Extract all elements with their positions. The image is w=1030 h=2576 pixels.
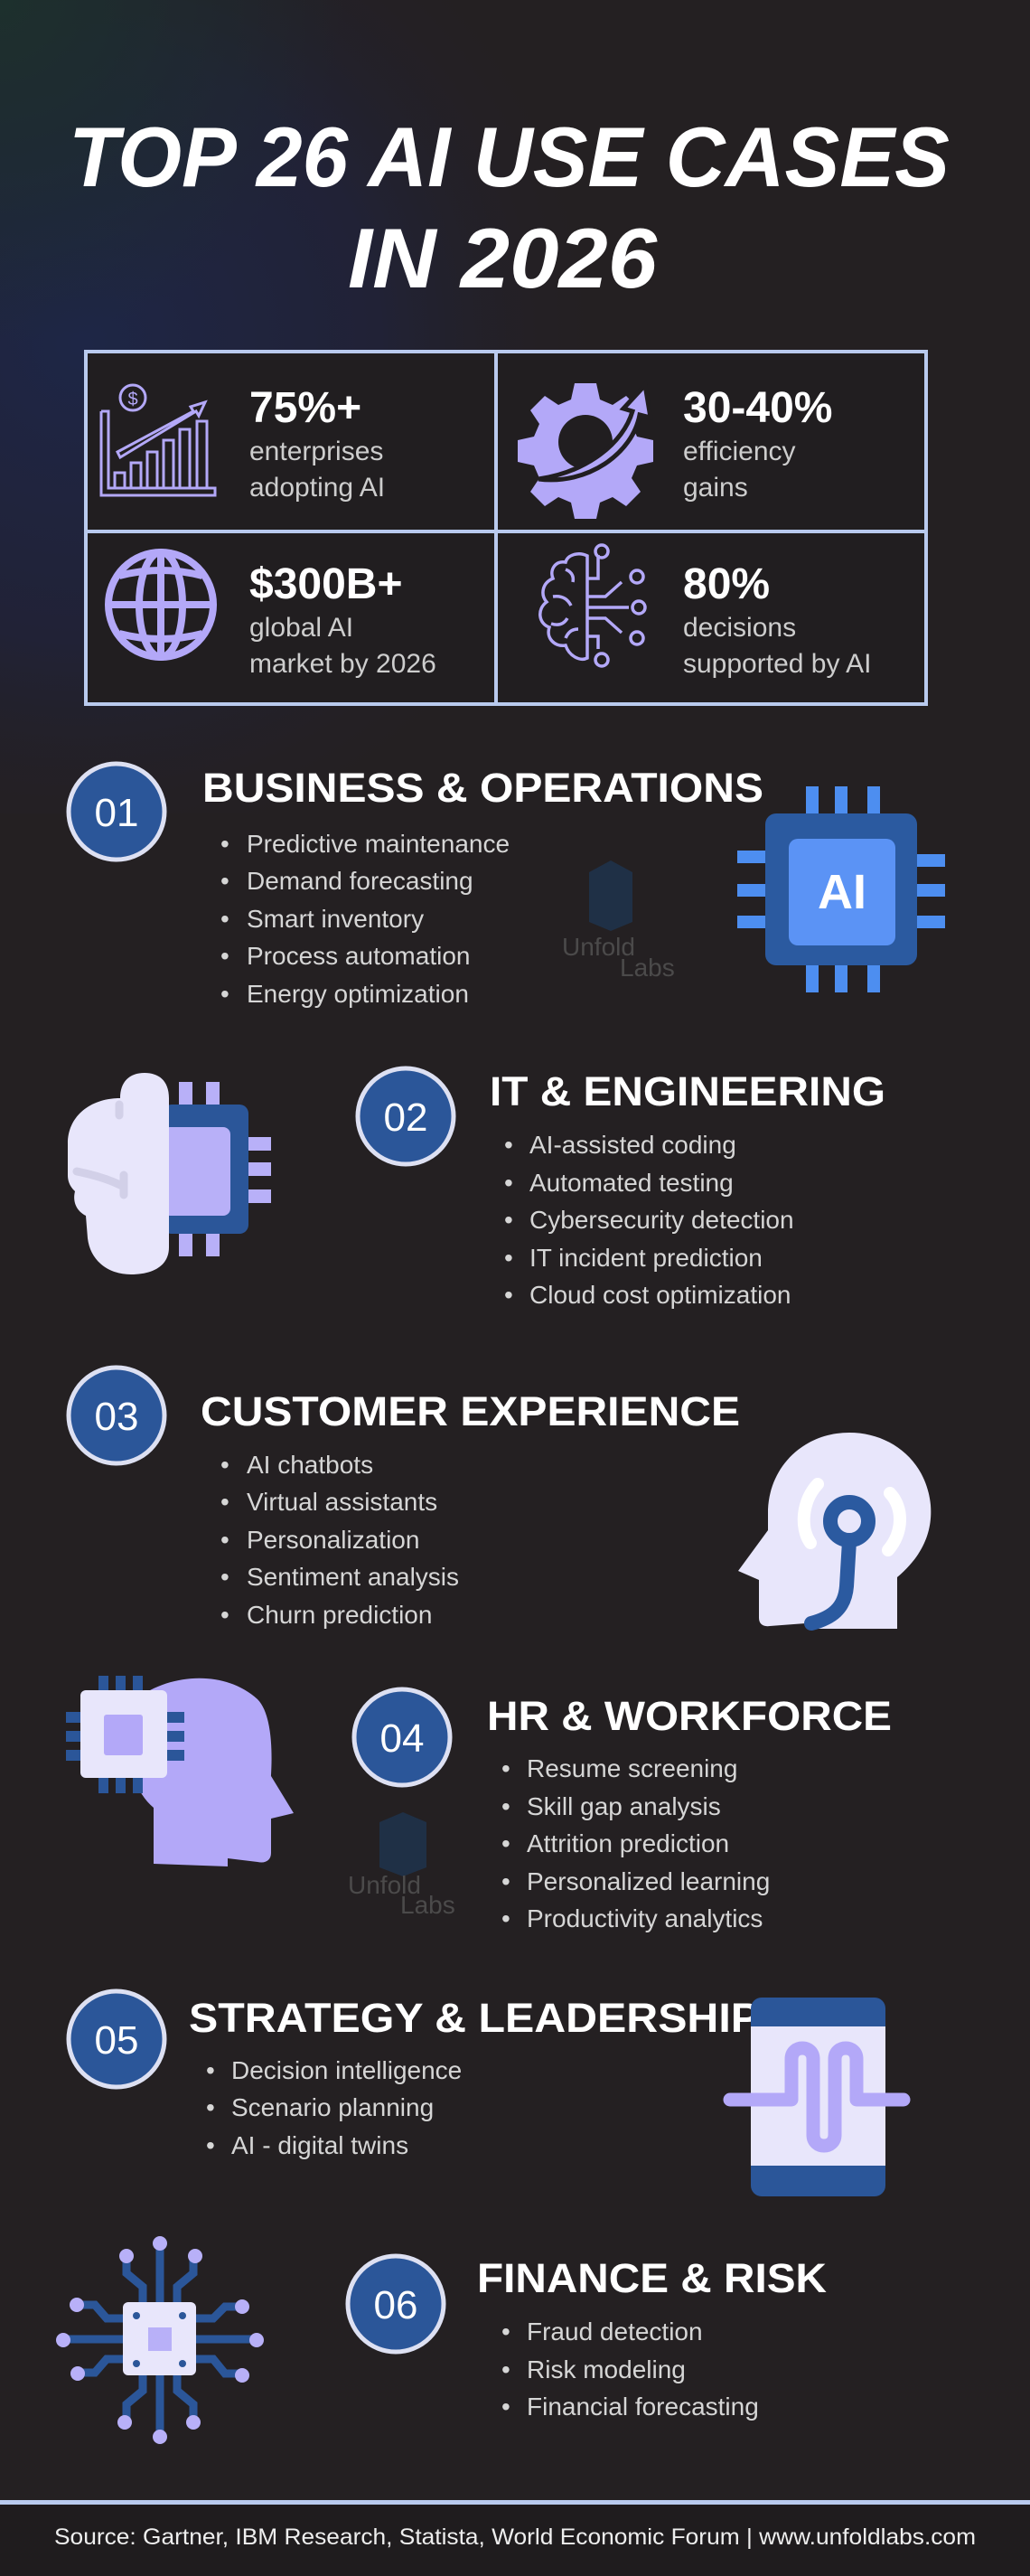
- bullet list 01: •: [220, 867, 229, 895]
- number badge 01: [69, 764, 164, 860]
- watermark: Labs: [400, 1891, 455, 1919]
- icon: brain chip: [68, 1073, 271, 1274]
- section 01: business & operations: [69, 764, 763, 1008]
- stat: 300B: [249, 560, 436, 679]
- stat: 300B: $300B+: [249, 560, 402, 608]
- heading 06: FINANCE & RISK: [477, 2255, 828, 2301]
- bullet list 01: Smart inventory: [247, 905, 424, 933]
- icon: brain circuit: [540, 545, 645, 666]
- bullet list 03: •: [220, 1563, 229, 1591]
- bullet list 06: Fraud detection: [527, 2317, 703, 2346]
- watermark: [348, 1812, 455, 1919]
- bullet list 03: •: [220, 1488, 229, 1516]
- icon: growth chart: $: [127, 390, 138, 409]
- stat: 80%: [683, 560, 871, 679]
- bullet list 03: •: [220, 1526, 229, 1554]
- stat: 80%: decisions: [683, 613, 796, 643]
- bullet list 01: Process automation: [247, 942, 470, 970]
- number badge 04: 04: [380, 1716, 424, 1761]
- bullet list 02: Cloud cost optimization: [529, 1281, 791, 1309]
- bullet list 02: •: [504, 1131, 513, 1159]
- stat: 30-40%: 30-40%: [683, 384, 832, 432]
- stat: 75%: 75%+: [249, 384, 361, 432]
- section 04: HR & workforce: [354, 1689, 892, 1932]
- bullet list 06: [501, 2317, 759, 2421]
- bullet list 03: Churn prediction: [247, 1601, 432, 1629]
- title: IN 2026: [348, 211, 658, 306]
- bullet list 01: Demand forecasting: [247, 867, 473, 895]
- heading 01: BUSINESS & OPERATIONS: [202, 765, 763, 811]
- bullet list 03: AI chatbots: [247, 1451, 373, 1479]
- footer: Source: Gartner, IBM Research, Statista, World Economic Forum | www.unfoldlabs.com: [54, 2524, 976, 2550]
- icon: growth chart: [101, 385, 215, 495]
- number badge 05: [69, 1991, 164, 2087]
- stat: 30-40%: efficiency: [683, 437, 796, 466]
- bullet list 06: •: [501, 2393, 510, 2421]
- bullet list 01: [220, 830, 510, 1008]
- icon: head with headset: [738, 1433, 931, 1629]
- bullet list 01: Energy optimization: [247, 980, 469, 1008]
- bullet list 04: Skill gap analysis: [527, 1792, 721, 1820]
- bullet list 05: •: [206, 2131, 215, 2159]
- watermark: [562, 860, 675, 982]
- bullet list 06: Financial forecasting: [527, 2393, 759, 2421]
- bullet list 04: •: [501, 1754, 510, 1782]
- icon: head with chip: [66, 1676, 294, 1866]
- bullet list 05: •: [206, 2056, 215, 2084]
- bullet list 04: Personalized learning: [527, 1867, 770, 1895]
- bullet list 06: •: [501, 2317, 510, 2346]
- number badge 02: 02: [384, 1095, 427, 1140]
- icon: circuit chip: [56, 2236, 264, 2444]
- section 05: strategy & leadership: [69, 1991, 760, 2159]
- title: TOP 26 AI USE CASES: [69, 109, 950, 204]
- stat: 75%: enterprises: [249, 437, 383, 466]
- section 06: finance & risk: [348, 2255, 828, 2421]
- bullet list 05: AI - digital twins: [231, 2131, 408, 2159]
- icon: phone with wave: [730, 1998, 904, 2196]
- stats panel: [86, 352, 926, 704]
- bullet list 03: •: [220, 1451, 229, 1479]
- bullet list 03: Sentiment analysis: [247, 1563, 459, 1591]
- watermark: Unfold: [562, 933, 635, 961]
- bullet list 03: Personalization: [247, 1526, 419, 1554]
- bullet list 06: Risk modeling: [527, 2355, 686, 2383]
- heading 05: STRATEGY & LEADERSHIP: [189, 1995, 760, 2041]
- bullet list 02: Automated testing: [529, 1169, 734, 1197]
- bullet list 02: [504, 1131, 794, 1309]
- number badge 06: 06: [374, 2283, 417, 2327]
- bullet list 03: Virtual assistants: [247, 1488, 437, 1516]
- number badge 01: 01: [95, 791, 138, 835]
- bullet list 03: •: [220, 1601, 229, 1629]
- heading 04: HR & WORKFORCE: [487, 1693, 892, 1739]
- bullet list 01: •: [220, 980, 229, 1008]
- bullet list 02: •: [504, 1244, 513, 1272]
- bullet list 05: Scenario planning: [231, 2093, 434, 2121]
- bullet list 02: IT incident prediction: [529, 1244, 763, 1272]
- title: [69, 109, 950, 306]
- bullet list 02: •: [504, 1169, 513, 1197]
- section 03: customer experience: [69, 1368, 740, 1629]
- stat: 300B: market by 2026: [249, 649, 436, 679]
- bullet list 01: Predictive maintenance: [247, 830, 510, 858]
- section 02: IT & engineering: [358, 1068, 885, 1309]
- bullet list 05: Decision intelligence: [231, 2056, 462, 2084]
- number badge 06: [348, 2256, 444, 2352]
- number badge 02: [358, 1068, 454, 1164]
- stat: 80%: supported by AI: [683, 649, 871, 679]
- icon: gear with arrow: [518, 383, 653, 519]
- bullet list 02: •: [504, 1206, 513, 1234]
- bullet list 04: Resume screening: [527, 1754, 737, 1782]
- bullet list 06: •: [501, 2355, 510, 2383]
- bullet list 02: AI-assisted coding: [529, 1131, 736, 1159]
- icon: AI chip: [737, 786, 945, 992]
- bullet list 04: Attrition prediction: [527, 1829, 729, 1857]
- bullet list 01: •: [220, 942, 229, 970]
- bullet list 02: Cybersecurity detection: [529, 1206, 794, 1234]
- footer: [0, 2500, 1030, 2576]
- number badge 04: [354, 1689, 450, 1785]
- bullet list 03: [220, 1451, 459, 1629]
- heading 03: CUSTOMER EXPERIENCE: [201, 1388, 740, 1434]
- bullet list 01: •: [220, 830, 229, 858]
- bullet list 01: •: [220, 905, 229, 933]
- stat: 300B: global AI: [249, 613, 353, 643]
- bullet list 04: Productivity analytics: [527, 1904, 763, 1932]
- number badge 03: [69, 1368, 164, 1463]
- watermark: Unfold: [348, 1871, 421, 1899]
- icon: globe: [108, 552, 213, 657]
- heading 02: IT & ENGINEERING: [490, 1068, 885, 1114]
- bullet list 04: •: [501, 1792, 510, 1820]
- stat: 75%: adopting AI: [249, 473, 385, 503]
- stat: 75%: [249, 384, 385, 503]
- bullet list 04: •: [501, 1829, 510, 1857]
- bullet list 05: •: [206, 2093, 215, 2121]
- bullet list 04: •: [501, 1867, 510, 1895]
- stat: 80%: 80%: [683, 560, 770, 608]
- stat: 30-40%: gains: [683, 473, 748, 503]
- icon: AI chip: AI: [818, 865, 866, 919]
- bullet list 05: [206, 2056, 462, 2159]
- stat: 30-40%: [683, 384, 832, 503]
- bullet list 04: [501, 1754, 770, 1932]
- number badge 05: 05: [95, 2018, 138, 2063]
- bullet list 02: •: [504, 1281, 513, 1309]
- watermark: Labs: [620, 954, 675, 982]
- number badge 03: 03: [95, 1395, 138, 1439]
- bullet list 04: •: [501, 1904, 510, 1932]
